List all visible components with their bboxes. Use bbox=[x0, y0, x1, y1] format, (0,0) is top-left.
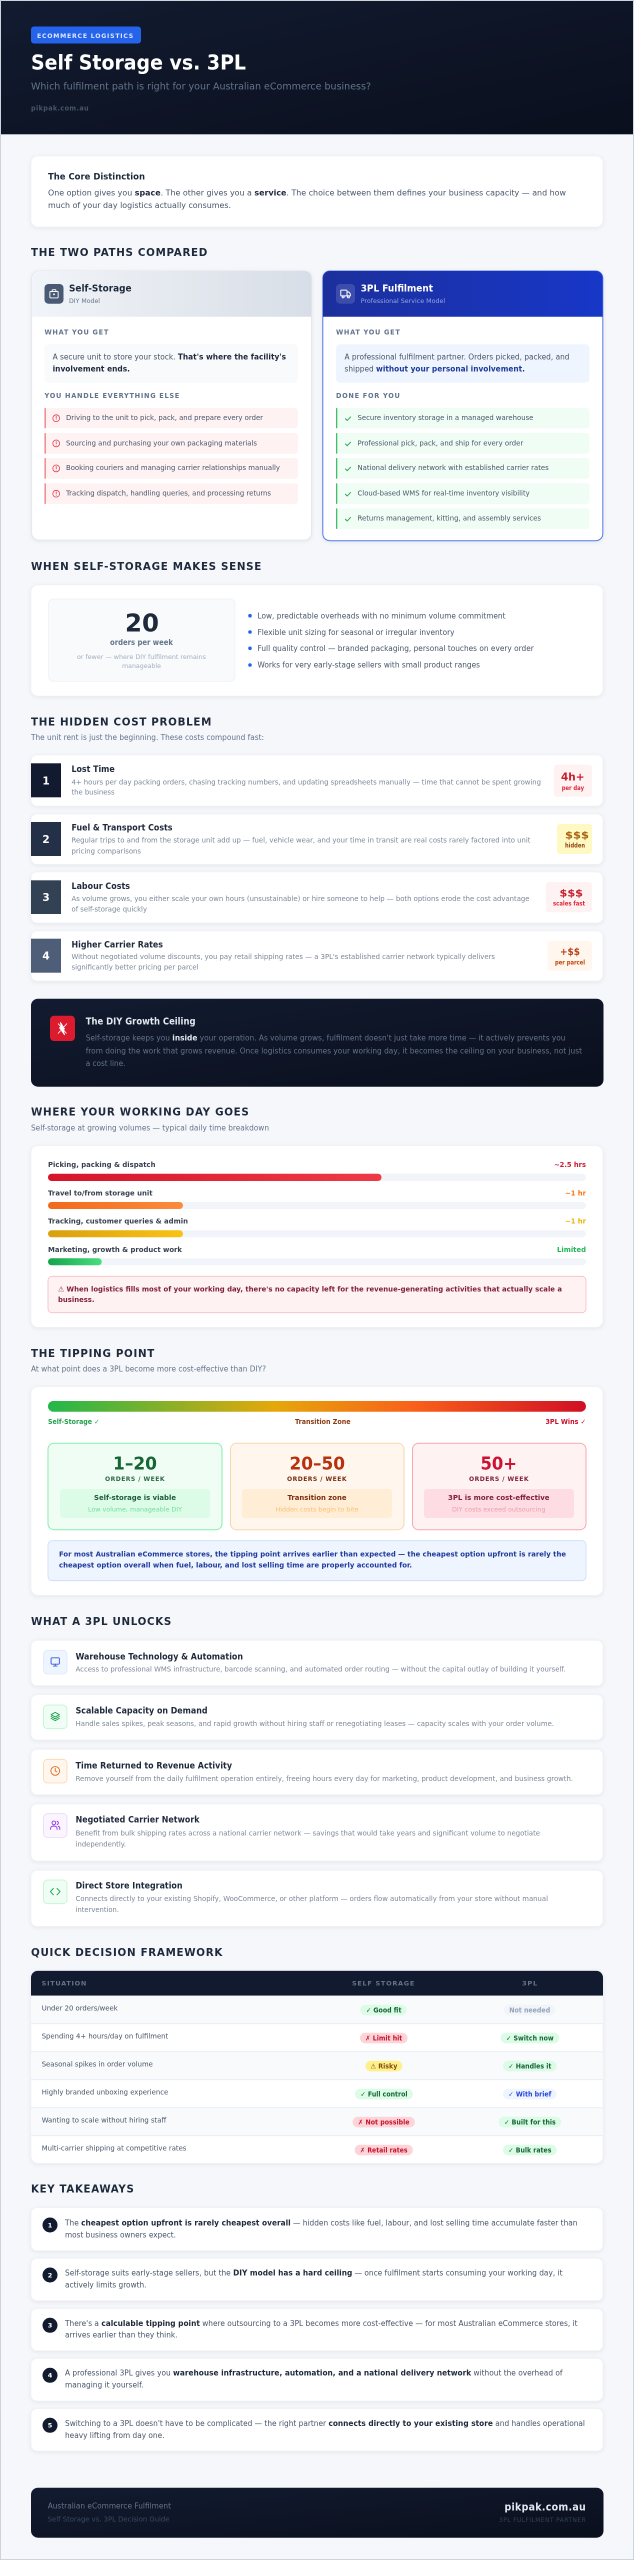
takeaway 2: actively limits growth. bbox=[65, 2280, 146, 2289]
list: tasks bbox=[44, 408, 298, 504]
list: services: Secure inventory storage in a managed warehouse bbox=[358, 414, 533, 422]
heading: hidden cost: THE HIDDEN COST PROBLEM bbox=[31, 717, 212, 729]
row: branded unboxing: ✓ With brief bbox=[508, 2090, 552, 2098]
cost row: lost time: 4+ hours per day packing orders, chasing tracking numbers, and updating spreadsheets manually — time that cannot be spent growing bbox=[72, 778, 541, 786]
list: tasks: Booking couriers and managing carrier relationships manually bbox=[66, 464, 280, 472]
takeaway 2: Self-storage suits early-stage sellers, but the DIY model has a hard ceiling — once fulfilment starts consuming your working day, it bbox=[65, 2269, 562, 2278]
badge: 4h+ bbox=[561, 771, 584, 783]
cost row: fuel and transport: Fuel & Transport Costs bbox=[72, 824, 172, 834]
row: seasonal spikes bbox=[42, 2060, 557, 2071]
tier: 20-50: 20–50 bbox=[290, 1454, 345, 1474]
row: spending 4+ hours: ✗ Limit hit bbox=[365, 2034, 403, 2042]
label: YOU HANDLE EVERYTHING ELSE bbox=[44, 392, 180, 400]
alert: ⚠ When logistics fills most of your working day, there's no capacity left for the revenue-generating activities that actually scale a bbox=[58, 1284, 562, 1293]
bar: travel: Travel to/from storage unit bbox=[48, 1190, 153, 1198]
cost row: fuel and transport: Regular trips to and from the storage unit add up — fuel, vehicle wear, and your time in transit are real costs rarely factored into unit bbox=[72, 837, 531, 845]
takeaway 2 bbox=[31, 2258, 603, 2301]
heading: working day: WHERE YOUR WORKING DAY GOES bbox=[31, 1107, 250, 1119]
unlock card: carrier network: Negotiated Carrier Network bbox=[76, 1816, 200, 1826]
takeaway 3: There's a calculable tipping point where outsourcing to a 3PL becomes more cost-effective — for most Australian eCommerce stores, it bbox=[64, 2319, 577, 2328]
unlock card: store integration: Direct Store Integration bbox=[76, 1882, 182, 1892]
takeaway 1: most business owners expect. bbox=[65, 2231, 176, 2240]
takeaway 3: 3 bbox=[48, 2322, 52, 2330]
panel: when self-storage makes sense bbox=[31, 585, 603, 696]
gradient scale: Transition Zone bbox=[295, 1418, 351, 1426]
table header: SELF STORAGE bbox=[352, 1979, 415, 1987]
badge: $$$ bbox=[565, 831, 589, 842]
tier: 1-20 bbox=[48, 1443, 222, 1530]
badge: +$$ bbox=[560, 947, 580, 958]
label: WHAT YOU GET bbox=[44, 329, 109, 337]
row: spending 4+ hours bbox=[42, 2032, 559, 2043]
tier: 1-20: Low volume, manageable DIY bbox=[88, 1506, 182, 1514]
badge bbox=[554, 765, 592, 797]
label: WHAT YOU GET bbox=[336, 329, 400, 337]
title: Self Storage vs. 3PL bbox=[31, 50, 246, 74]
list: services: Cloud-based WMS for real-time inventory visibility bbox=[358, 490, 530, 498]
cost row: fuel and transport: pricing comparisons bbox=[72, 847, 141, 855]
unlock card: scalable capacity bbox=[31, 1695, 603, 1740]
takeaway 2: 2 bbox=[48, 2271, 52, 2279]
list: reasons: Works for very early-stage sellers with small product ranges bbox=[258, 661, 480, 670]
row: under 20 orders: Not needed bbox=[509, 2006, 550, 2014]
list: services: National delivery network with established carrier rates bbox=[358, 464, 549, 472]
takeaway 5: 5 bbox=[48, 2422, 53, 2430]
bar: travel bbox=[48, 1190, 587, 1209]
tier: 50+: DIY costs exceed outsourcing bbox=[452, 1506, 546, 1514]
row: branded unboxing bbox=[42, 2088, 557, 2099]
heading: working day: Self-storage at growing volumes — typical daily time breakdown bbox=[31, 1123, 269, 1132]
cost row: carrier rates bbox=[31, 931, 603, 981]
tier: 1-20: 1–20 bbox=[113, 1454, 157, 1474]
callout: DIY growth ceiling bbox=[31, 999, 604, 1087]
tier: 1-20: Self-storage is viable bbox=[94, 1493, 176, 1502]
unlock card: time returned: Time Returned to Revenue Activity bbox=[76, 1761, 232, 1771]
stat: 20 orders per week: manageable bbox=[122, 662, 161, 670]
card title bbox=[361, 283, 445, 305]
row: scale without staff: Wanting to scale without hiring staff bbox=[42, 2116, 166, 2124]
tier: 20-50: Hidden costs begin to bite bbox=[276, 1506, 358, 1514]
bar: marketing: Marketing, growth & product work bbox=[48, 1246, 182, 1254]
cost row: lost time: the business bbox=[72, 788, 115, 796]
gradient scale bbox=[48, 1401, 586, 1426]
takeaway 4: 4 bbox=[48, 2372, 53, 2380]
note: For most Australian eCommerce stores, the tipping point arrives earlier than expected — the cheapest option upfront is rarely the bbox=[59, 1550, 566, 1559]
unlock card: warehouse technology: Access to professional WMS infrastructure, barcode scanning, and automated order routing — without the capital outlay of building it yourself. bbox=[76, 1665, 565, 1673]
icon: truck bbox=[336, 284, 355, 304]
icon: storage box bbox=[44, 284, 64, 304]
table header: SITUATION bbox=[42, 1979, 87, 1987]
cost row: labour: of self-storage quickly bbox=[72, 905, 147, 913]
row: scale without staff: ✗ Not possible bbox=[358, 2118, 410, 2126]
quote: shipped without your personal involvement. bbox=[344, 365, 525, 374]
list: reasons bbox=[248, 612, 535, 670]
list: reasons: Full quality control — branded packaging, personal touches on every order bbox=[258, 644, 535, 653]
callout text bbox=[86, 1034, 582, 1068]
takeaway 1: The cheapest option upfront is rarely cheapest overall — hidden costs like fuel, labour, and lost selling time accumulate faster than bbox=[64, 2219, 577, 2228]
note: cheapest option overall when fuel, labour, and lost selling time are properly accounted for. bbox=[59, 1561, 412, 1570]
row: multi-carrier: Multi-carrier shipping at competitive rates bbox=[42, 2144, 187, 2152]
alert bbox=[48, 1276, 586, 1313]
row: multi-carrier: ✗ Retail rates bbox=[360, 2146, 408, 2154]
badge bbox=[548, 941, 592, 971]
heading: The Core Distinction bbox=[48, 173, 145, 183]
row: seasonal spikes: Seasonal spikes in order volume bbox=[42, 2060, 153, 2068]
heading: tipping point: At what point does a 3PL become more cost-effective than DIY? bbox=[31, 1365, 266, 1374]
unlock card: carrier network: independently. bbox=[76, 1840, 126, 1848]
bar: travel: ~1 hr bbox=[565, 1190, 587, 1198]
bar: tracking bbox=[48, 1218, 587, 1237]
takeaway 5: Switching to a 3PL doesn't have to be complicated — the right partner connects directly to your existing store and handles operational bbox=[65, 2419, 585, 2428]
heading: tipping point: THE TIPPING POINT bbox=[31, 1348, 155, 1360]
badge bbox=[557, 824, 592, 854]
row: seasonal spikes: ✓ Handles it bbox=[508, 2062, 552, 2070]
site url: pikpak.com.au bbox=[31, 104, 89, 112]
row: scale without staff: ✓ Built for this bbox=[504, 2118, 556, 2126]
heading: working day bbox=[31, 1107, 269, 1132]
heading: tipping point bbox=[31, 1348, 266, 1374]
footer: Self Storage vs. 3PL Decision Guide bbox=[48, 2515, 170, 2523]
footer bbox=[31, 2488, 604, 2538]
cost row: labour bbox=[31, 872, 603, 923]
icon: layers bbox=[44, 1705, 67, 1729]
card title: DIY Model bbox=[69, 297, 100, 305]
heading: hidden cost: The unit rent is just the beginning. These costs compound fast: bbox=[30, 733, 264, 742]
callout text: Self-storage keeps you inside your operation. As volume grows, fulfilment doesn't just take more time — it actively prevents you bbox=[86, 1034, 565, 1043]
list: services: Professional pick, pack, and ship for every order bbox=[358, 439, 523, 447]
bar: tracking: ~1 hr bbox=[565, 1218, 587, 1226]
alert: business. bbox=[58, 1295, 94, 1304]
tier: 50+ bbox=[412, 1443, 586, 1530]
list: services: Returns management, kitting, and assembly services bbox=[358, 514, 541, 522]
footer: pikpak.com.au bbox=[504, 2501, 586, 2513]
tier: 1-20: ORDERS / WEEK bbox=[105, 1475, 165, 1483]
takeaway 5: heavy lifting from day one. bbox=[65, 2431, 164, 2440]
badge: per day bbox=[562, 785, 584, 792]
takeaway 5 bbox=[31, 2409, 603, 2451]
cost row: labour: Labour Costs bbox=[72, 882, 130, 892]
quote bbox=[336, 344, 590, 383]
badge: per parcel bbox=[555, 960, 585, 967]
table: decision framework bbox=[31, 1971, 603, 2163]
list: tasks: Sourcing and purchasing your own packaging materials bbox=[66, 439, 257, 447]
row: under 20 orders bbox=[42, 2004, 555, 2015]
cost row: lost time bbox=[31, 755, 603, 806]
icon: code bbox=[44, 1880, 67, 1904]
subtitle: Which fulfilment path is right for your Australian eCommerce business? bbox=[31, 81, 371, 92]
card title: Professional Service Model bbox=[361, 297, 445, 305]
panel: 3PL fulfilment bbox=[323, 271, 603, 541]
heading: decision framework: QUICK DECISION FRAMEWORK bbox=[31, 1947, 223, 1959]
unlock card: store integration: Connects directly to your existing Shopify, WooCommerce, or other platform — orders flow automatically from your store without manual bbox=[76, 1895, 548, 1903]
icon: monitor bbox=[44, 1650, 67, 1674]
callout text: a cost line. bbox=[86, 1059, 126, 1068]
footer: 3PL FULFILMENT PARTNER bbox=[499, 2517, 586, 2524]
unlock card: time returned bbox=[31, 1749, 603, 1795]
takeaway 4 bbox=[31, 2358, 603, 2401]
takeaway 4: A professional 3PL gives you warehouse infrastructure, automation, and a national delivery network without the overhead of bbox=[65, 2369, 563, 2378]
unlock card: warehouse technology: Warehouse Technology & Automation bbox=[76, 1652, 243, 1662]
badge: ECOMMERCE LOGISTICS bbox=[37, 33, 134, 40]
heading: self-storage sense: WHEN SELF-STORAGE MAKES SENSE bbox=[31, 561, 262, 573]
row: scale without staff bbox=[42, 2116, 561, 2127]
unlock card: store integration: intervention. bbox=[76, 1906, 119, 1914]
unlock card: scalable capacity: Handle sales spikes, peak seasons, and rapid growth without hiring staff or renegotiating leases — capacity scales with your order volume. bbox=[76, 1720, 554, 1728]
badge: scales fast bbox=[553, 901, 585, 908]
cost row: labour: As volume grows, you either scale your own hours (unsustainable) or hire someone to help — both options erode the cost advantage bbox=[72, 895, 530, 903]
quote: A secure unit to store your stock. That's where the facility's bbox=[53, 353, 286, 362]
heading: hidden cost bbox=[30, 717, 264, 742]
bar: marketing: Limited bbox=[557, 1246, 586, 1254]
unlock card: store integration bbox=[31, 1870, 603, 1926]
cost row: fuel and transport bbox=[31, 814, 603, 864]
quote: A professional fulfilment partner. Orders picked, packed, and bbox=[344, 353, 570, 362]
list: reasons: Flexible unit sizing for seasonal or irregular inventory bbox=[258, 628, 455, 637]
row: multi-carrier bbox=[42, 2144, 557, 2155]
cost row: lost time: 1 bbox=[42, 775, 50, 787]
label: DONE FOR YOU bbox=[336, 392, 400, 400]
row: spending 4+ hours: Spending 4+ hours/day on fulfilment bbox=[42, 2032, 168, 2040]
callout text: from doing the work that grows revenue. Once logistics consumes your working day, it becomes the ceiling on your business, not just bbox=[86, 1046, 582, 1055]
card title: 3PL Fulfilment bbox=[361, 283, 434, 294]
card title bbox=[69, 283, 132, 305]
tier: 50+: 3PL is more cost-effective bbox=[448, 1493, 550, 1502]
heading: unlocks: WHAT A 3PL UNLOCKS bbox=[31, 1616, 172, 1628]
tier: 50+: ORDERS / WEEK bbox=[469, 1475, 529, 1483]
cost row: carrier rates: significantly better pricing per parcel bbox=[72, 964, 199, 972]
header banner bbox=[1, 1, 633, 134]
takeaway 3 bbox=[31, 2309, 603, 2351]
badge: $$$ bbox=[560, 889, 583, 900]
bar: tracking: Tracking, customer queries & admin bbox=[48, 1218, 188, 1226]
body text: One option gives you space. The other gives you a service. The choice between them defines your business capacity — and how bbox=[48, 189, 566, 198]
takeaway 1: 1 bbox=[48, 2221, 53, 2229]
body text bbox=[48, 189, 566, 210]
gradient scale: Self-Storage ✓ bbox=[48, 1418, 100, 1426]
table header bbox=[42, 1979, 538, 1987]
cost row: carrier rates: Without negotiated volume discounts, you pay retail shipping rates — a 3PL's established carrier network typically delivers bbox=[72, 953, 495, 961]
badge bbox=[31, 26, 141, 44]
list: services bbox=[336, 408, 590, 529]
takeaway 4: managing it yourself. bbox=[65, 2381, 144, 2390]
tier: 20-50: Transition zone bbox=[288, 1493, 347, 1502]
heading: key takeaways: KEY TAKEAWAYS bbox=[31, 2184, 134, 2196]
row: spending 4+ hours: ✓ Switch now bbox=[506, 2034, 554, 2042]
unlock card: time returned: Remove yourself from the daily fulfilment operation entirely, freeing hours every day for marketing, product development, and business growth. bbox=[76, 1775, 573, 1783]
badge bbox=[546, 882, 592, 912]
unlock card: carrier network bbox=[31, 1804, 603, 1861]
row: seasonal spikes: ⚠ Risky bbox=[370, 2062, 398, 2070]
quote: involvement ends. bbox=[53, 365, 130, 374]
stat: 20 orders per week: 20 bbox=[125, 609, 159, 638]
takeaway 3: arrives earlier than they think. bbox=[65, 2331, 178, 2340]
heading: two paths: THE TWO PATHS COMPARED bbox=[31, 247, 208, 259]
row: multi-carrier: ✓ Bulk rates bbox=[508, 2146, 551, 2154]
takeaway 1 bbox=[31, 2208, 603, 2251]
icon: users bbox=[44, 1814, 67, 1837]
quote bbox=[44, 344, 298, 383]
unlock card: carrier network: Benefit from bulk shipping rates across a national carrier network — savings that would take years and significant volume to negotiate bbox=[76, 1829, 540, 1837]
panel: self-storage bbox=[32, 271, 311, 540]
row: branded unboxing: ✓ Full control bbox=[360, 2090, 408, 2098]
cost row: labour: 3 bbox=[42, 892, 50, 904]
icon: bolt off bbox=[50, 1016, 75, 1041]
cost row: fuel and transport: 2 bbox=[42, 834, 50, 846]
panel: time breakdown bar chart bbox=[31, 1146, 603, 1327]
row: under 20 orders: Under 20 orders/week bbox=[42, 2004, 119, 2012]
bar: picking: Picking, packing & dispatch bbox=[48, 1161, 156, 1169]
panel: core distinction bbox=[31, 156, 603, 227]
gradient scale: 3PL Wins ✓ bbox=[546, 1418, 586, 1426]
stat: 20 orders per week: orders per week bbox=[110, 638, 174, 647]
bar: picking: ~2.5 hrs bbox=[554, 1161, 586, 1169]
body text: much of your day logistics actually consumes. bbox=[48, 201, 231, 210]
stat: 20 orders per week: or fewer — where DIY fulfilment remains bbox=[77, 653, 207, 661]
stat: 20 orders per week bbox=[48, 599, 235, 681]
tier: 50+: 50+ bbox=[480, 1454, 517, 1474]
tier: 20-50: ORDERS / WEEK bbox=[287, 1475, 347, 1483]
row: branded unboxing: Highly branded unboxing experience bbox=[42, 2088, 168, 2096]
callout: DIY growth ceiling: The DIY Growth Ceiling bbox=[86, 1017, 196, 1028]
cost row: carrier rates: 4 bbox=[42, 951, 50, 963]
unlock card: scalable capacity: Scalable Capacity on Demand bbox=[76, 1707, 207, 1717]
row: under 20 orders: ✓ Good fit bbox=[366, 2006, 402, 2014]
cost row: carrier rates: Higher Carrier Rates bbox=[72, 941, 163, 951]
footer: Australian eCommerce Fulfilment bbox=[48, 2501, 171, 2510]
note bbox=[48, 1541, 586, 1581]
list: tasks: Driving to the unit to pick, pack, and prepare every order bbox=[66, 414, 263, 422]
list: reasons: Low, predictable overheads with no minimum volume commitment bbox=[258, 612, 506, 620]
badge: hidden bbox=[565, 843, 585, 850]
table header: 3PL bbox=[522, 1979, 538, 1987]
bar: marketing bbox=[48, 1246, 586, 1265]
bar: picking bbox=[48, 1161, 586, 1181]
list: tasks: Tracking dispatch, handling queries, and processing returns bbox=[65, 490, 271, 498]
cost row: lost time: Lost Time bbox=[72, 765, 115, 775]
tier: 20-50 bbox=[230, 1443, 404, 1530]
unlock card: warehouse technology bbox=[31, 1640, 603, 1686]
panel: tipping point bbox=[31, 1387, 603, 1595]
card title: Self-Storage bbox=[69, 283, 132, 294]
icon: clock bbox=[44, 1759, 67, 1783]
